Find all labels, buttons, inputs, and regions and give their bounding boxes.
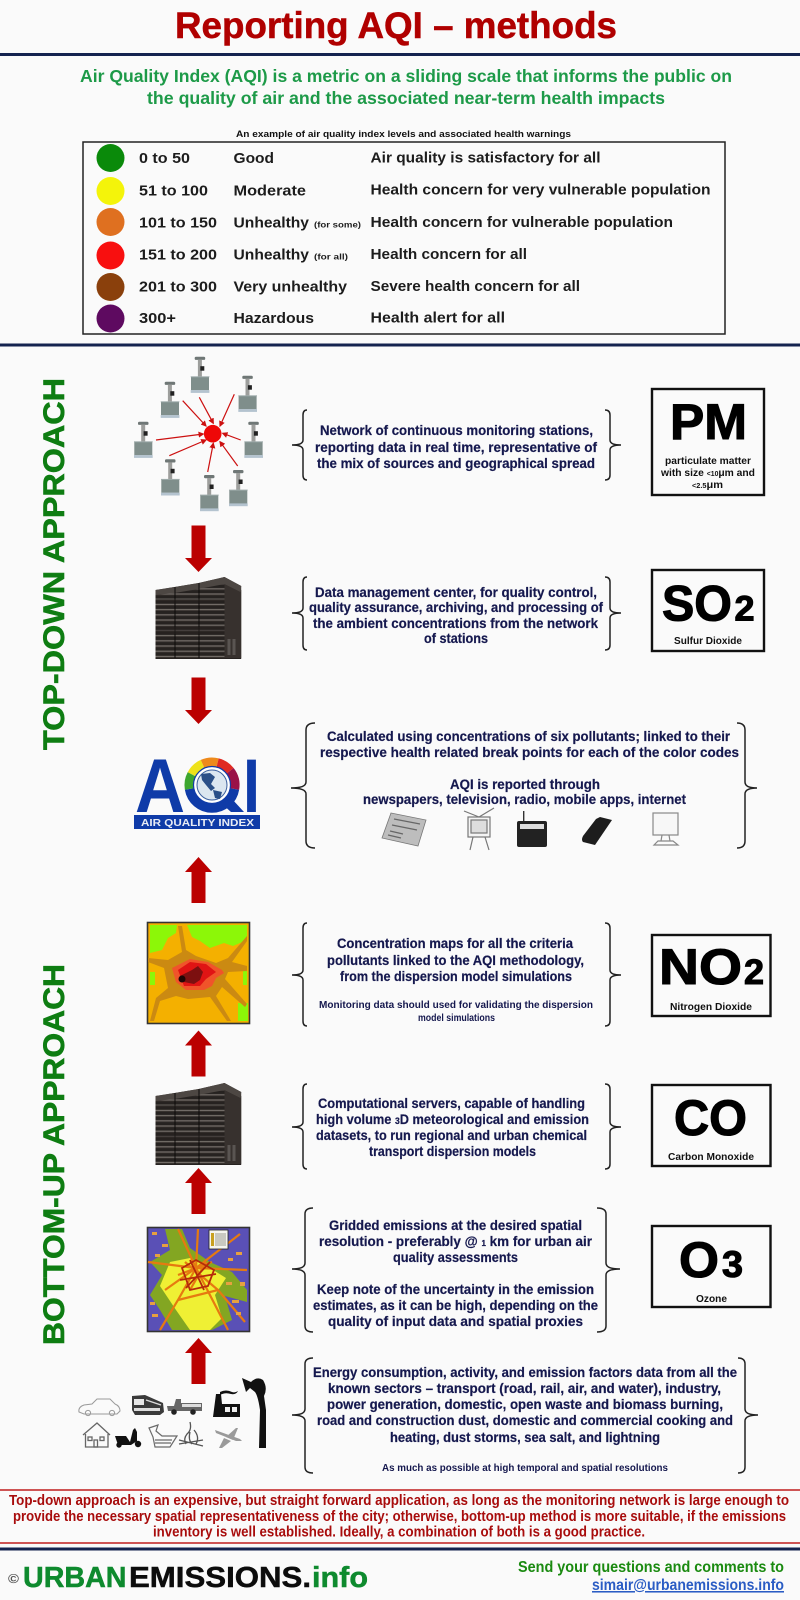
icon: factory	[213, 1390, 240, 1417]
footer contact: Send your questions and comments to	[518, 1559, 784, 1576]
bracket: left	[292, 1084, 307, 1169]
bracket: left	[292, 577, 307, 650]
row: 51 to 100	[96, 177, 710, 205]
icon: television	[464, 808, 494, 850]
footer logo	[8, 1562, 368, 1594]
text block: gridded emissions: quality assessments	[393, 1250, 518, 1265]
row: 101 to 150: 101 to 150	[139, 214, 217, 232]
bracket: left	[292, 1208, 313, 1332]
card: PM	[652, 389, 764, 495]
footer contact: simair@urbanemissions.info	[592, 1577, 784, 1594]
card: SO2: SO	[662, 576, 732, 632]
row: 300+: Health alert for all	[370, 310, 505, 326]
icon: smokestack	[242, 1378, 266, 1448]
icon: computer	[653, 813, 678, 845]
text block: gridded emissions: quality of input data and spatial proxies	[328, 1314, 583, 1329]
text block: computational servers	[292, 1084, 621, 1169]
icon: newspaper	[382, 813, 426, 846]
icon: mobile phone	[582, 817, 612, 845]
text block: monitoring network	[292, 410, 621, 480]
footer logo: info	[312, 1562, 368, 1594]
heading: bottom-up approach: BOTTOM-UP APPROACH	[38, 964, 71, 1345]
icon: house	[83, 1423, 110, 1447]
bracket: right	[605, 577, 621, 650]
text block: activity data	[292, 1358, 758, 1474]
card: O3: O	[679, 1232, 719, 1288]
footer logo: EMISSIONS.	[129, 1562, 311, 1594]
text block: concentration maps: model simulations	[418, 1013, 495, 1024]
logo: AQI: A	[135, 744, 185, 829]
footer contact	[518, 1559, 784, 1594]
icon: bus	[132, 1395, 164, 1415]
text block: activity data: road and construction dust, domestic and commercial cooking and	[317, 1413, 733, 1428]
panel: AQI level table	[83, 142, 725, 334]
text block: data management: quality assurance, archiving, and processing of	[309, 600, 604, 615]
card: SO2	[652, 570, 764, 651]
text block: activity data: Energy consumption, activity, and emission factors data from all the	[313, 1365, 737, 1380]
bracket: left	[292, 1358, 313, 1473]
bracket: right	[605, 410, 621, 480]
bracket: left	[291, 723, 315, 848]
card: NO2: Nitrogen Dioxide	[670, 1001, 752, 1013]
icon: plane	[215, 1428, 242, 1448]
text block: gridded emissions	[292, 1208, 620, 1332]
bracket: right	[605, 1084, 621, 1169]
callout: conclusion	[0, 1490, 800, 1543]
card: O3: Ozone	[696, 1293, 727, 1305]
card: SO2: Sulfur Dioxide	[674, 635, 742, 647]
heading: top-down approach: TOP-DOWN APPROACH	[38, 378, 71, 750]
row: 0 to 50: Air quality is satisfactory for all	[370, 150, 600, 167]
icon: truck	[167, 1399, 202, 1415]
row: 0 to 50: Good	[234, 150, 274, 167]
card: NO2: 2	[744, 953, 764, 992]
text block: concentration maps: Concentration maps for all the criteria	[337, 936, 574, 951]
text block: concentration maps: pollutants linked to the AQI methodology,	[327, 953, 584, 968]
text block: data management: of stations	[424, 631, 488, 646]
text block: AQI calculation and reporting: AQI is reported through	[450, 777, 600, 792]
bracket: right	[738, 1358, 758, 1473]
text block: computational servers: transport dispersion models	[369, 1144, 536, 1159]
row: 101 to 150: Health concern for vulnerable population	[370, 214, 673, 231]
icon: scooter	[115, 1428, 141, 1448]
footer logo: ©	[8, 1571, 19, 1586]
text block: computational servers: datasets, to run regional and urban chemical	[316, 1128, 587, 1143]
icon: ship	[149, 1425, 177, 1447]
row: 300+: 300+	[139, 310, 176, 327]
text block: AQI calculation and reporting	[291, 723, 757, 850]
title: Reporting AQI – methods	[175, 5, 617, 46]
row: 101 to 150	[96, 208, 673, 236]
bracket: right	[597, 1208, 620, 1332]
icon: monitoring station network	[134, 357, 263, 511]
row: 201 to 300: Severe health concern for all	[370, 278, 580, 295]
text block: data management	[292, 577, 621, 650]
row: 101 to 150: (for some)	[314, 220, 361, 230]
arrow: up to computational servers	[185, 1168, 212, 1214]
bracket: right	[605, 923, 621, 1026]
text block: concentration maps: from the dispersion model simulations	[340, 969, 572, 984]
arrow: down to data center	[185, 526, 212, 572]
text block: computational servers: Computational servers, capable of handling	[318, 1096, 585, 1111]
bracket: right	[737, 723, 757, 848]
text block: concentration maps: Monitoring data should used for validating the dispersion	[319, 1000, 593, 1011]
arrow: up to gridded emissions	[185, 1338, 212, 1384]
arrow: down to AQI	[185, 678, 212, 724]
icon: radio	[517, 811, 547, 847]
text block: concentration maps	[292, 923, 621, 1026]
row: 201 to 300: 201 to 300	[139, 278, 217, 296]
table caption: An example of air quality index levels and associated health warnings	[236, 129, 571, 140]
row: 51 to 100: Moderate	[234, 182, 306, 200]
text block: data management: the ambient concentrations from the network	[313, 616, 599, 631]
row: 201 to 300	[96, 273, 580, 301]
map: concentration map	[148, 922, 250, 1024]
text block: computational servers: high volume 3D meteorological and emission	[316, 1112, 589, 1127]
text block: gridded emissions: Keep note of the uncertainty in the emission	[317, 1282, 594, 1297]
card: CO: Carbon Monoxide	[668, 1151, 754, 1163]
text block: activity data: heating, dust storms, sea salt, and lightning	[390, 1430, 660, 1445]
card: CO	[652, 1085, 770, 1166]
row: 201 to 300: Very unhealthy	[234, 278, 348, 296]
text block: AQI calculation and reporting: newspapers, television, radio, mobile apps, internet	[363, 792, 687, 807]
text block: monitoring network: the mix of sources and geographical spread	[317, 456, 595, 471]
text block: gridded emissions: estimates, as it can be high, depending on the	[313, 1298, 598, 1313]
card: NO2	[652, 935, 770, 1016]
arrow: up to concentration map	[185, 1030, 212, 1076]
row: 151 to 200: Health concern for all	[370, 246, 527, 263]
card: O3	[652, 1226, 770, 1307]
row: 0 to 50: 0 to 50	[139, 150, 190, 167]
bracket: left	[292, 410, 307, 480]
intro text: Air Quality Index (AQI) is a metric on a sliding scale that informs the public on	[80, 66, 732, 86]
card: PM: <2.5μm	[692, 479, 723, 491]
logo: AQI: AIR QUALITY INDEX	[141, 817, 254, 829]
callout: conclusion: inventory is well established. Ideally, a combination of both is a good practice.	[153, 1524, 645, 1540]
card: PM: PM	[670, 394, 747, 450]
row: 151 to 200: 151 to 200	[139, 246, 217, 264]
intro text	[80, 66, 732, 108]
card: PM: particulate matter	[665, 455, 751, 467]
text block: monitoring network: Network of continuous monitoring stations,	[320, 423, 593, 438]
text block: monitoring network: reporting data in real time, representative of	[315, 440, 598, 455]
card: NO2: NO	[659, 939, 742, 995]
footer logo: URBAN	[23, 1562, 126, 1594]
text block: activity data: power generation, domestic, open waste and biomass burning,	[327, 1397, 723, 1412]
text block: gridded emissions: Gridded emissions at the desired spatial	[329, 1218, 582, 1233]
card: O3: 3	[722, 1244, 743, 1285]
text block: activity data: known sectors – transport (road, rail, air, and water), industry,	[328, 1381, 721, 1396]
card: PM: with size <10μm and	[660, 467, 755, 479]
row: 151 to 200: Unhealthy	[234, 246, 310, 264]
text block: AQI calculation and reporting: Calculated using concentrations of six pollutants; linked to their	[327, 729, 731, 744]
intro text: the quality of air and the associated near-term health impacts	[147, 88, 665, 108]
row: 51 to 100: Health concern for very vulnerable population	[370, 182, 710, 199]
logo: AQI	[134, 744, 260, 829]
text block: gridded emissions: resolution - preferably @ 1 km for urban air	[319, 1234, 593, 1249]
row: 51 to 100: 51 to 100	[139, 182, 208, 200]
row: 151 to 200	[96, 242, 527, 270]
row: 101 to 150: Unhealthy	[234, 214, 310, 232]
icon: fire	[179, 1422, 203, 1446]
arrow: up to AQI	[185, 857, 212, 903]
text block: data management: Data management center, for quality control,	[315, 585, 597, 600]
icons: emission sources	[79, 1378, 266, 1448]
icon: data center servers	[156, 577, 241, 659]
row: 300+: Hazardous	[234, 310, 314, 327]
logo: AQI: I	[243, 744, 260, 829]
icon: computational servers	[156, 1083, 241, 1165]
map: gridded emissions	[148, 1228, 250, 1332]
card: SO2: 2	[734, 590, 754, 628]
row: 0 to 50	[96, 144, 600, 172]
text block: activity data: As much as possible at high temporal and spatial resolutions	[382, 1463, 668, 1474]
card: CO: CO	[674, 1090, 747, 1146]
row: 300+	[96, 304, 505, 332]
text block: AQI calculation and reporting: respective health related break points for each of the color codes	[320, 745, 739, 760]
icon: car	[79, 1399, 120, 1416]
row: 151 to 200: (for all)	[314, 252, 348, 262]
bracket: left	[292, 923, 307, 1026]
